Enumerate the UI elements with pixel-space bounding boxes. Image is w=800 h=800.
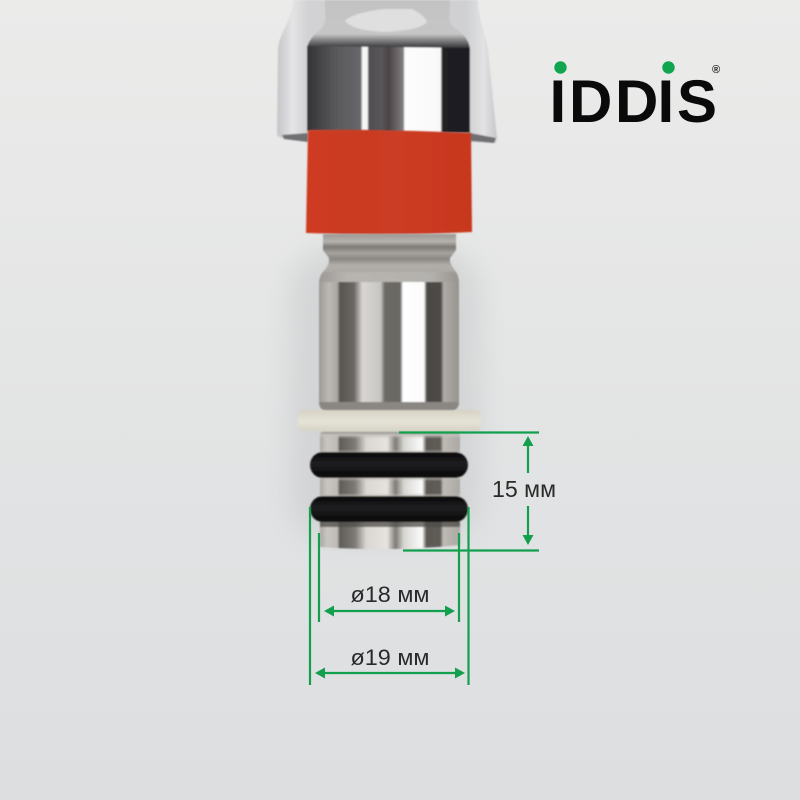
logo wordmark: I bbox=[550, 68, 566, 135]
logo registered mark: ® bbox=[712, 64, 720, 76]
soft shadow around fitting bbox=[290, 250, 480, 540]
product: nickel neck and body bbox=[319, 234, 459, 412]
logo green dot bbox=[554, 61, 567, 74]
dimension: 15 mm height bbox=[399, 432, 556, 550]
logo: IDDIS bbox=[550, 61, 720, 135]
product: chrome nut bbox=[277, 0, 497, 143]
dimension: diameter 19 mm bbox=[310, 507, 468, 685]
dimension: diameter 18 mm bbox=[319, 533, 459, 622]
dimension: diameter 18 mm: ø18 мм bbox=[350, 582, 430, 607]
logo wordmark: S bbox=[677, 68, 717, 135]
product: white washer bbox=[298, 410, 481, 433]
logo wordmark: I bbox=[658, 68, 674, 135]
product: metal rings and black o-rings bbox=[310, 432, 468, 549]
logo green dot second bbox=[662, 61, 675, 74]
dimension: 15 mm height: 15 мм bbox=[492, 476, 556, 502]
logo wordmark: D bbox=[615, 68, 658, 135]
dimension: diameter 19 mm: ø19 мм bbox=[350, 645, 430, 670]
product: red sleeve bbox=[306, 130, 472, 234]
logo wordmark: D bbox=[569, 68, 612, 135]
